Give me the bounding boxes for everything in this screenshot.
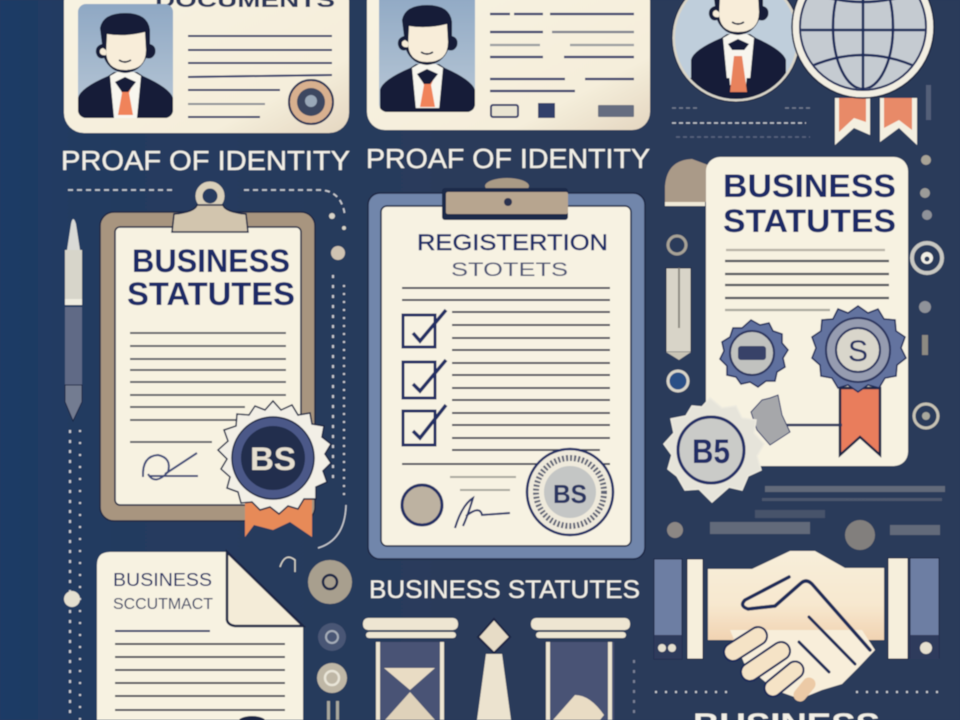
panel: scroll business statutes	[665, 157, 908, 466]
seal text: BS	[250, 441, 296, 477]
checklist heading: REGISTERTION	[417, 230, 608, 255]
panel: bottom-left contract	[97, 552, 303, 720]
seal left	[720, 320, 788, 387]
text lines	[115, 631, 285, 710]
icon: right hourglass	[531, 618, 630, 720]
dashed connector	[68, 190, 345, 216]
folded corner	[227, 552, 303, 626]
thumb outline	[743, 577, 870, 650]
panel: bottom-left contract: SCCUTMACT	[113, 596, 213, 613]
icon: seal B5	[664, 398, 764, 502]
faint caption band	[667, 486, 945, 550]
icon: handshake	[654, 551, 939, 699]
ribbons	[835, 98, 917, 145]
icon: seal BS with ribbon	[218, 401, 331, 537]
checkbox 3	[403, 405, 446, 445]
icon: globe badge with ribbons	[792, 0, 934, 145]
heading: proof of identity left: PROAF OF IDENTITY	[61, 145, 350, 176]
panel: clipboard business statutes: STATUTES	[127, 276, 295, 312]
dotted vertical rules	[70, 275, 938, 720]
panel: top-left identity card	[64, 0, 349, 133]
clipboard board	[100, 212, 315, 521]
icon: left hourglass	[363, 618, 458, 720]
footer marks	[491, 103, 634, 118]
panel: registration checklist clipboard	[368, 178, 645, 559]
id photo	[78, 4, 173, 118]
icon: tie	[477, 619, 511, 720]
cuffs	[654, 558, 939, 659]
signature	[455, 498, 510, 528]
checkbox 1	[403, 310, 446, 347]
text lines	[402, 288, 610, 490]
seal letter: S	[848, 335, 868, 368]
clipboard heading: BUSINESS	[132, 243, 290, 279]
stamp: BS	[553, 479, 587, 509]
heading: proof of identity right: PROAF OF IDENTITY	[366, 143, 650, 174]
text lines	[725, 250, 889, 310]
seal right	[812, 306, 906, 392]
scroll cap	[665, 159, 708, 202]
left hand fist fingers	[733, 636, 809, 695]
hands	[708, 551, 884, 699]
clip	[442, 178, 568, 220]
panel: scroll business statutes: STATUTES	[723, 203, 896, 239]
heading: business statutes: BUSINESS STATUTES	[369, 576, 640, 604]
checkbox 2	[403, 360, 446, 398]
panel: registration checklist clipboard: STOTETS	[451, 260, 568, 281]
clip	[172, 185, 248, 232]
ribbon	[840, 388, 880, 455]
finger lines	[799, 617, 855, 672]
icon: target circles	[308, 560, 352, 720]
scroll heading: BUSINESS	[723, 168, 896, 204]
stamp	[527, 449, 613, 535]
panel: top-middle identity card	[367, 0, 650, 130]
text lines	[188, 36, 332, 117]
contract heading: BUSINESS	[113, 570, 212, 590]
text lines	[490, 14, 634, 91]
connector line	[785, 424, 842, 426]
signature	[143, 453, 198, 480]
panel: clipboard business statutes	[100, 185, 315, 521]
faint caption under portrait	[672, 108, 812, 137]
id photo	[379, 0, 475, 112]
text lines	[130, 333, 286, 442]
tube ornament	[666, 268, 691, 360]
seal text: B5	[692, 433, 730, 471]
icon: round portrait	[670, 0, 805, 105]
small ornaments	[64, 85, 942, 607]
arms and palm	[708, 551, 884, 640]
icon: pen	[65, 219, 82, 421]
seal	[289, 80, 333, 124]
round mark	[402, 485, 442, 525]
blot	[751, 395, 790, 445]
